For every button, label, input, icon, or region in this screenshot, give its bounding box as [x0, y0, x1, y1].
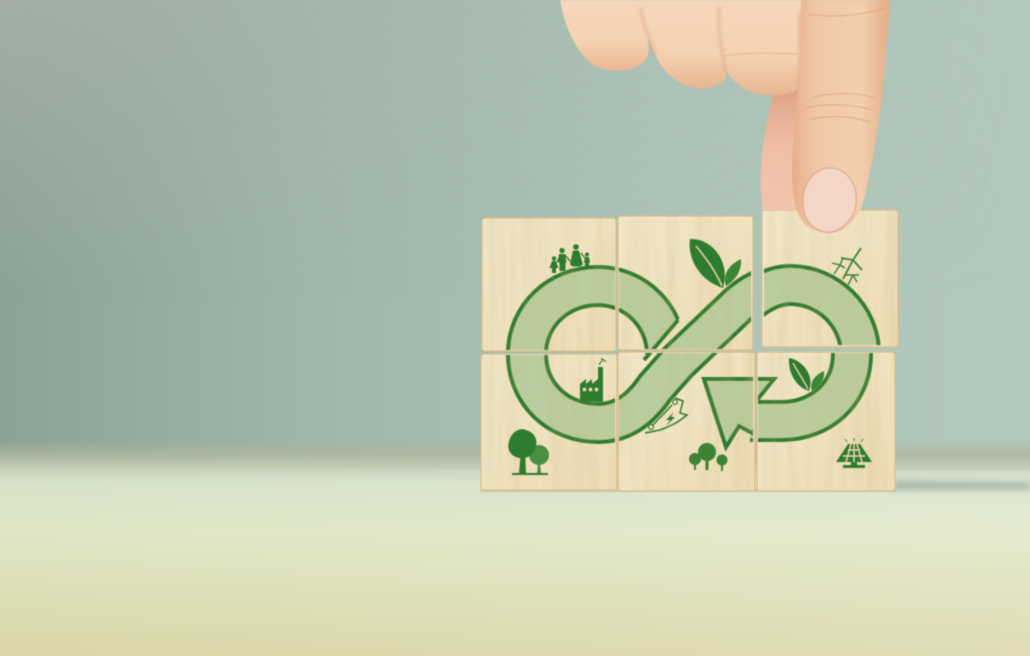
middle finger [718, 0, 802, 95]
icon: three trees [689, 443, 728, 471]
icons [508, 239, 872, 475]
fingernail [803, 168, 856, 232]
icon: leaves on lower block [789, 358, 824, 391]
icon: electric car [645, 398, 687, 433]
ring finger [638, 0, 726, 88]
icon: two trees [508, 429, 549, 475]
icon: factory [580, 359, 605, 402]
icon: family [550, 244, 590, 273]
wooden blocks [481, 210, 898, 491]
finger separations [640, 6, 800, 86]
table surface [0, 440, 1030, 656]
thumb behind [761, 90, 802, 211]
block: bottom left [481, 354, 617, 490]
hand [560, 0, 890, 233]
block shadow on table [480, 480, 1030, 492]
block: bottom right [757, 352, 895, 491]
wood grain overlay [480, 208, 900, 493]
middle finger knuckle crease [724, 53, 798, 56]
block: top right [762, 210, 898, 347]
infinity arrow symbol [527, 285, 860, 447]
block: top left [482, 218, 616, 351]
block: top middle [618, 216, 753, 350]
block: bottom middle [618, 352, 755, 491]
index finger [792, 0, 890, 233]
little finger [560, 0, 649, 71]
icon: leaves on top block [690, 239, 741, 288]
background wall [0, 0, 1030, 453]
icon: wind turbines [832, 248, 862, 285]
knuckle creases [806, 8, 885, 122]
icon: solar panel [836, 438, 872, 468]
